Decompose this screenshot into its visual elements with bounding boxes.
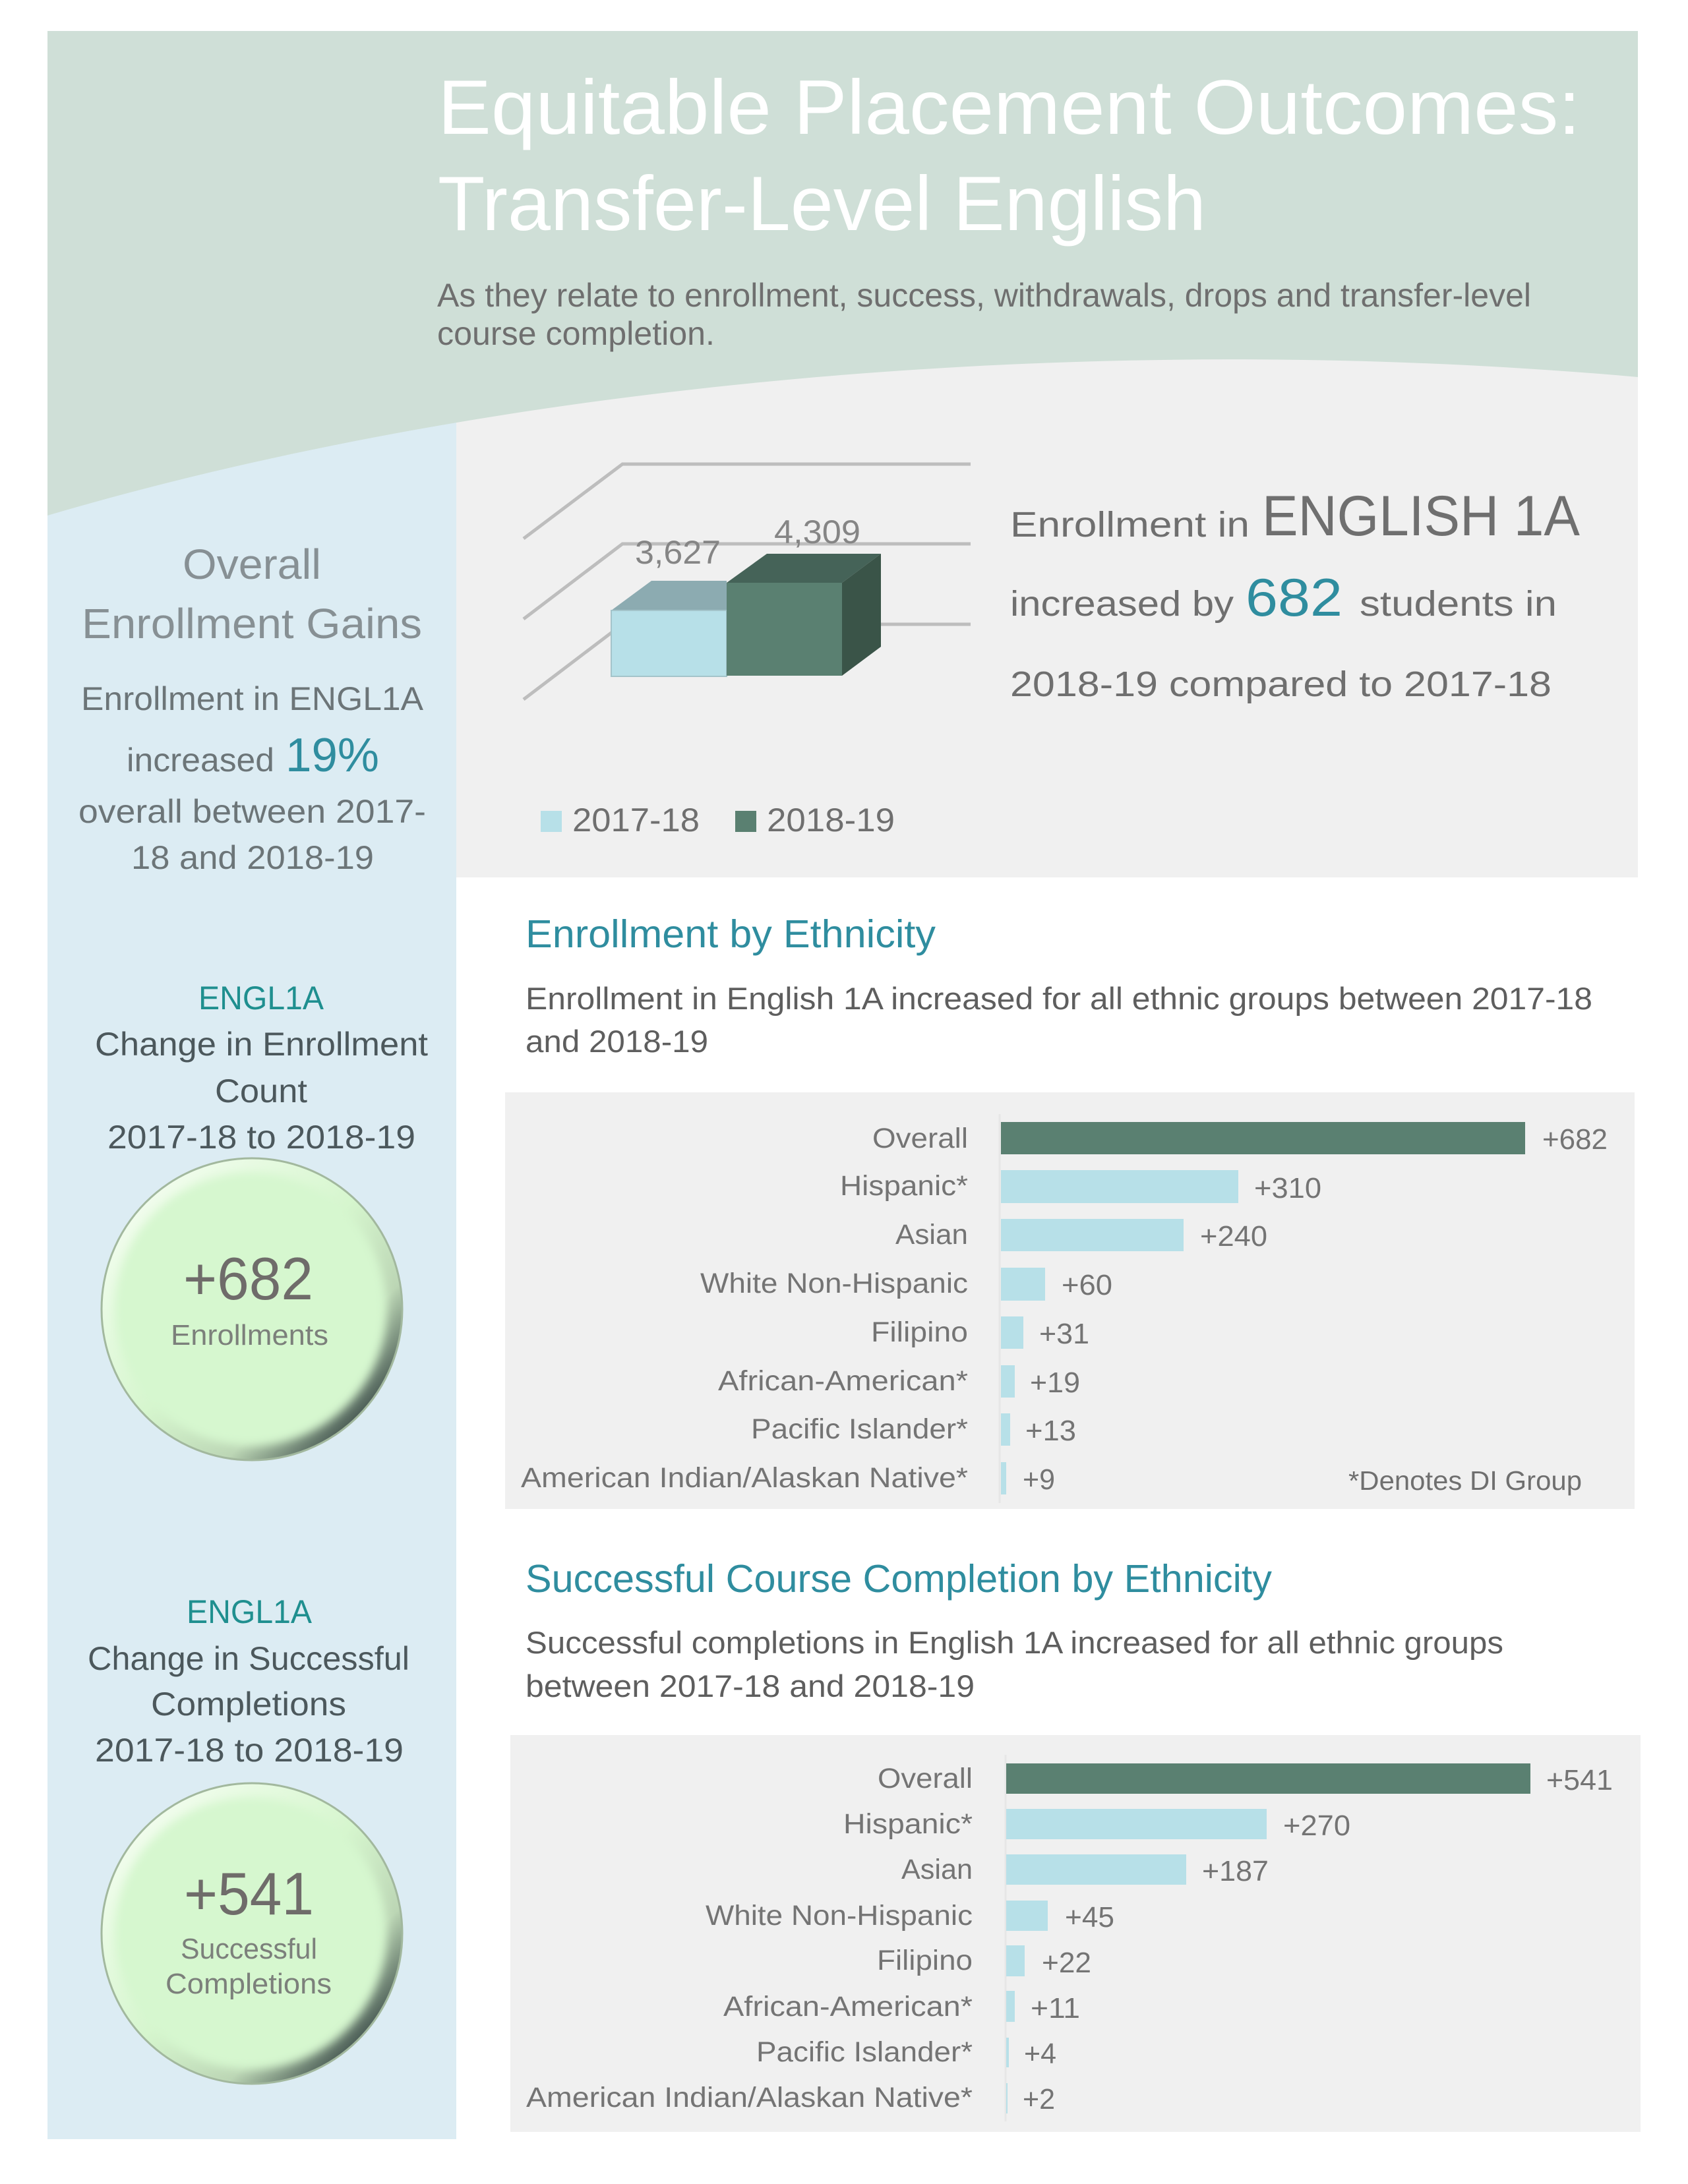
- row: White Non-Hispanic: [706, 1900, 1114, 1933]
- row: Hispanic: +310: [1254, 1172, 1321, 1204]
- text: completion description: Successful completions in English 1A increased for all ethnic groups: [526, 1625, 1503, 1660]
- row: Asian: +240: [1200, 1220, 1267, 1253]
- sidebar heading: overall enrollment gains: Overall: [183, 541, 321, 588]
- sidebar text: 19 percent increase: Enrollment in ENGL1A: [81, 680, 424, 717]
- row: White Non-Hispanic: White Non-Hispanic: [700, 1268, 968, 1299]
- row: Pacific Islander: Pacific Islander*: [751, 1413, 968, 1445]
- data label: 4,309: 4,309: [774, 514, 860, 550]
- row: American Indian/Alaskan Native: +2: [1023, 2083, 1055, 2115]
- callout: enrollment in English 1A: students in: [1360, 584, 1557, 624]
- panel: successful completion bar chart: [510, 1735, 1641, 2132]
- row: Hispanic: Hispanic*: [840, 1170, 968, 1202]
- data label: 3,627: 3,627: [635, 534, 721, 571]
- badge: +682 enrollments: [102, 1158, 402, 1460]
- row: Filipino: +22: [1042, 1947, 1091, 1979]
- sidebar text: change in enrollment count: Change in Enrollment: [95, 1026, 428, 1063]
- row: White Non-Hispanic: White Non-Hispanic: [706, 1900, 973, 1932]
- row: American Indian/Alaskan Native: +9: [1023, 1463, 1055, 1496]
- text: enrollment description: and 2018-19: [526, 1024, 708, 1059]
- sidebar text: 19 percent increase: 18 and 2018-19: [131, 839, 374, 876]
- bar: 2018-19: [727, 554, 881, 676]
- title: Transfer-Level English: [438, 160, 1206, 247]
- callout: enrollment in English 1A: increased by: [1010, 584, 1234, 624]
- row: American Indian/Alaskan Native: American Indian/Alaskan Native*: [526, 2082, 973, 2113]
- callout: enrollment in English 1A: 682: [1246, 568, 1342, 628]
- sidebar text: change in successful completions: Change in Successful: [88, 1640, 409, 1677]
- text: completion description: [526, 1625, 1503, 1703]
- badge: +541 successful completions: +541: [184, 1861, 314, 1928]
- row: African-American: African-American*: [718, 1365, 968, 1397]
- chart legend: 2017-18: [572, 802, 700, 839]
- text: completion description: between 2017-18 and 2018-19: [526, 1668, 975, 1703]
- subtitle: [437, 277, 1531, 352]
- sidebar heading: overall enrollment gains: [82, 541, 422, 647]
- sidebar text: change in successful completions: Completions: [151, 1686, 346, 1723]
- panel: enrollment by ethnicity bar chart: [505, 1092, 1635, 1509]
- badge: +541 successful completions: Completions: [166, 1968, 332, 2000]
- callout: enrollment in English 1A: ENGLISH 1A: [1262, 485, 1581, 548]
- callout: enrollment in English 1A: 2018-19 compared to 2017-18: [1010, 664, 1552, 704]
- sidebar text: 19 percent increase: [78, 680, 426, 876]
- row: Hispanic: Hispanic*: [843, 1808, 973, 1840]
- row: Filipino: [871, 1316, 1089, 1350]
- row: Pacific Islander: +13: [1025, 1415, 1076, 1447]
- chart legend: 2018-19: [767, 802, 895, 839]
- badge: +682 enrollments: +682: [183, 1246, 313, 1313]
- sidebar text: change in successful completions: [88, 1593, 409, 1769]
- row: Pacific Islander: Pacific Islander*: [756, 2036, 973, 2068]
- row: Hispanic: +270: [1283, 1810, 1350, 1842]
- row: Overall: [878, 1763, 1613, 1796]
- row: Hispanic: [843, 1808, 1350, 1842]
- row: Filipino: Filipino: [871, 1316, 968, 1348]
- row: African-American: African-American*: [723, 1991, 973, 2022]
- row: Overall: [872, 1122, 1608, 1156]
- row: Pacific Islander: +4: [1024, 2038, 1056, 2070]
- row: Asian: Asian: [901, 1854, 973, 1885]
- row: Asian: Asian: [895, 1219, 968, 1251]
- sidebar text: 19 percent increase: overall between 2017-: [78, 793, 426, 830]
- row: Filipino: +31: [1039, 1318, 1089, 1350]
- row: Filipino: Filipino: [877, 1945, 973, 1976]
- 3D bar chart: total enrollment: [524, 464, 971, 699]
- sidebar text: 19 percent increase: increased: [127, 742, 274, 779]
- subtitle: course completion.: [437, 315, 715, 352]
- row: American Indian/Alaskan Native: American Indian/Alaskan Native*: [521, 1462, 968, 1494]
- row: Asian: [901, 1854, 1269, 1887]
- sidebar text: change in successful completions: 2017-18 to 2018-19: [95, 1732, 404, 1769]
- row: African-American: [718, 1365, 1080, 1399]
- callout: enrollment in English 1A: [1010, 485, 1581, 704]
- row: Asian: +187: [1202, 1855, 1269, 1887]
- title: [438, 64, 1581, 247]
- row: Hispanic: [840, 1170, 1321, 1204]
- title: Equitable Placement Outcomes:: [438, 64, 1581, 150]
- sidebar text: change in enrollment count: ENGL1A: [198, 980, 324, 1017]
- row: African-American: +19: [1030, 1367, 1080, 1399]
- panel: header wave: [47, 31, 1638, 516]
- row: Filipino: [877, 1945, 1091, 1979]
- sidebar text: change in enrollment count: [95, 980, 428, 1156]
- sidebar text: change in enrollment count: Count: [215, 1073, 307, 1109]
- row: White Non-Hispanic: +60: [1062, 1269, 1112, 1301]
- sidebar text: change in enrollment count: 2017-18 to 2018-19: [107, 1119, 415, 1156]
- row: Pacific Islander: [751, 1413, 1076, 1447]
- row: White Non-Hispanic: +45: [1065, 1901, 1114, 1933]
- row: African-American: [723, 1991, 1080, 2024]
- panel: sidebar background: [47, 396, 456, 2139]
- row: African-American: +11: [1031, 1992, 1080, 2024]
- text: enrollment description: Enrollment in English 1A increased for all ethnic groups between 2017-18: [526, 981, 1592, 1016]
- heading: enrollment by ethnicity: Enrollment by Ethnicity: [526, 912, 936, 956]
- callout: enrollment in English 1A: Enrollment in: [1010, 505, 1250, 545]
- chart legend: [541, 802, 895, 839]
- row: Overall: +682: [1542, 1123, 1608, 1156]
- badge: +541 successful completions: [102, 1783, 402, 2084]
- bar: 2017-18: [611, 581, 727, 676]
- row: Pacific Islander: [756, 2036, 1056, 2070]
- row: Overall: +541: [1546, 1764, 1613, 1796]
- sidebar heading: overall enrollment gains: Enrollment Gains: [82, 600, 422, 647]
- panel: enrollment summary background: [456, 330, 1638, 877]
- badge: +541 successful completions: Successful: [181, 1933, 317, 1965]
- footnote: denotes DI group: *Denotes DI Group: [1348, 1465, 1582, 1496]
- sidebar text: 19 percent increase: 19%: [286, 729, 379, 782]
- subtitle: As they relate to enrollment, success, withdrawals, drops and transfer-level: [437, 277, 1531, 314]
- text: enrollment description: [526, 981, 1592, 1059]
- row: White Non-Hispanic: [700, 1268, 1112, 1301]
- heading: successful course completion by ethnicity: Successful Course Completion by Ethnicity: [526, 1557, 1272, 1601]
- sidebar text: change in successful completions: ENGL1A: [187, 1593, 313, 1630]
- row: Overall: Overall: [878, 1763, 973, 1794]
- row: Overall: Overall: [872, 1123, 968, 1154]
- row: Asian: [895, 1219, 1267, 1253]
- badge: +682 enrollments: Enrollments: [171, 1319, 328, 1351]
